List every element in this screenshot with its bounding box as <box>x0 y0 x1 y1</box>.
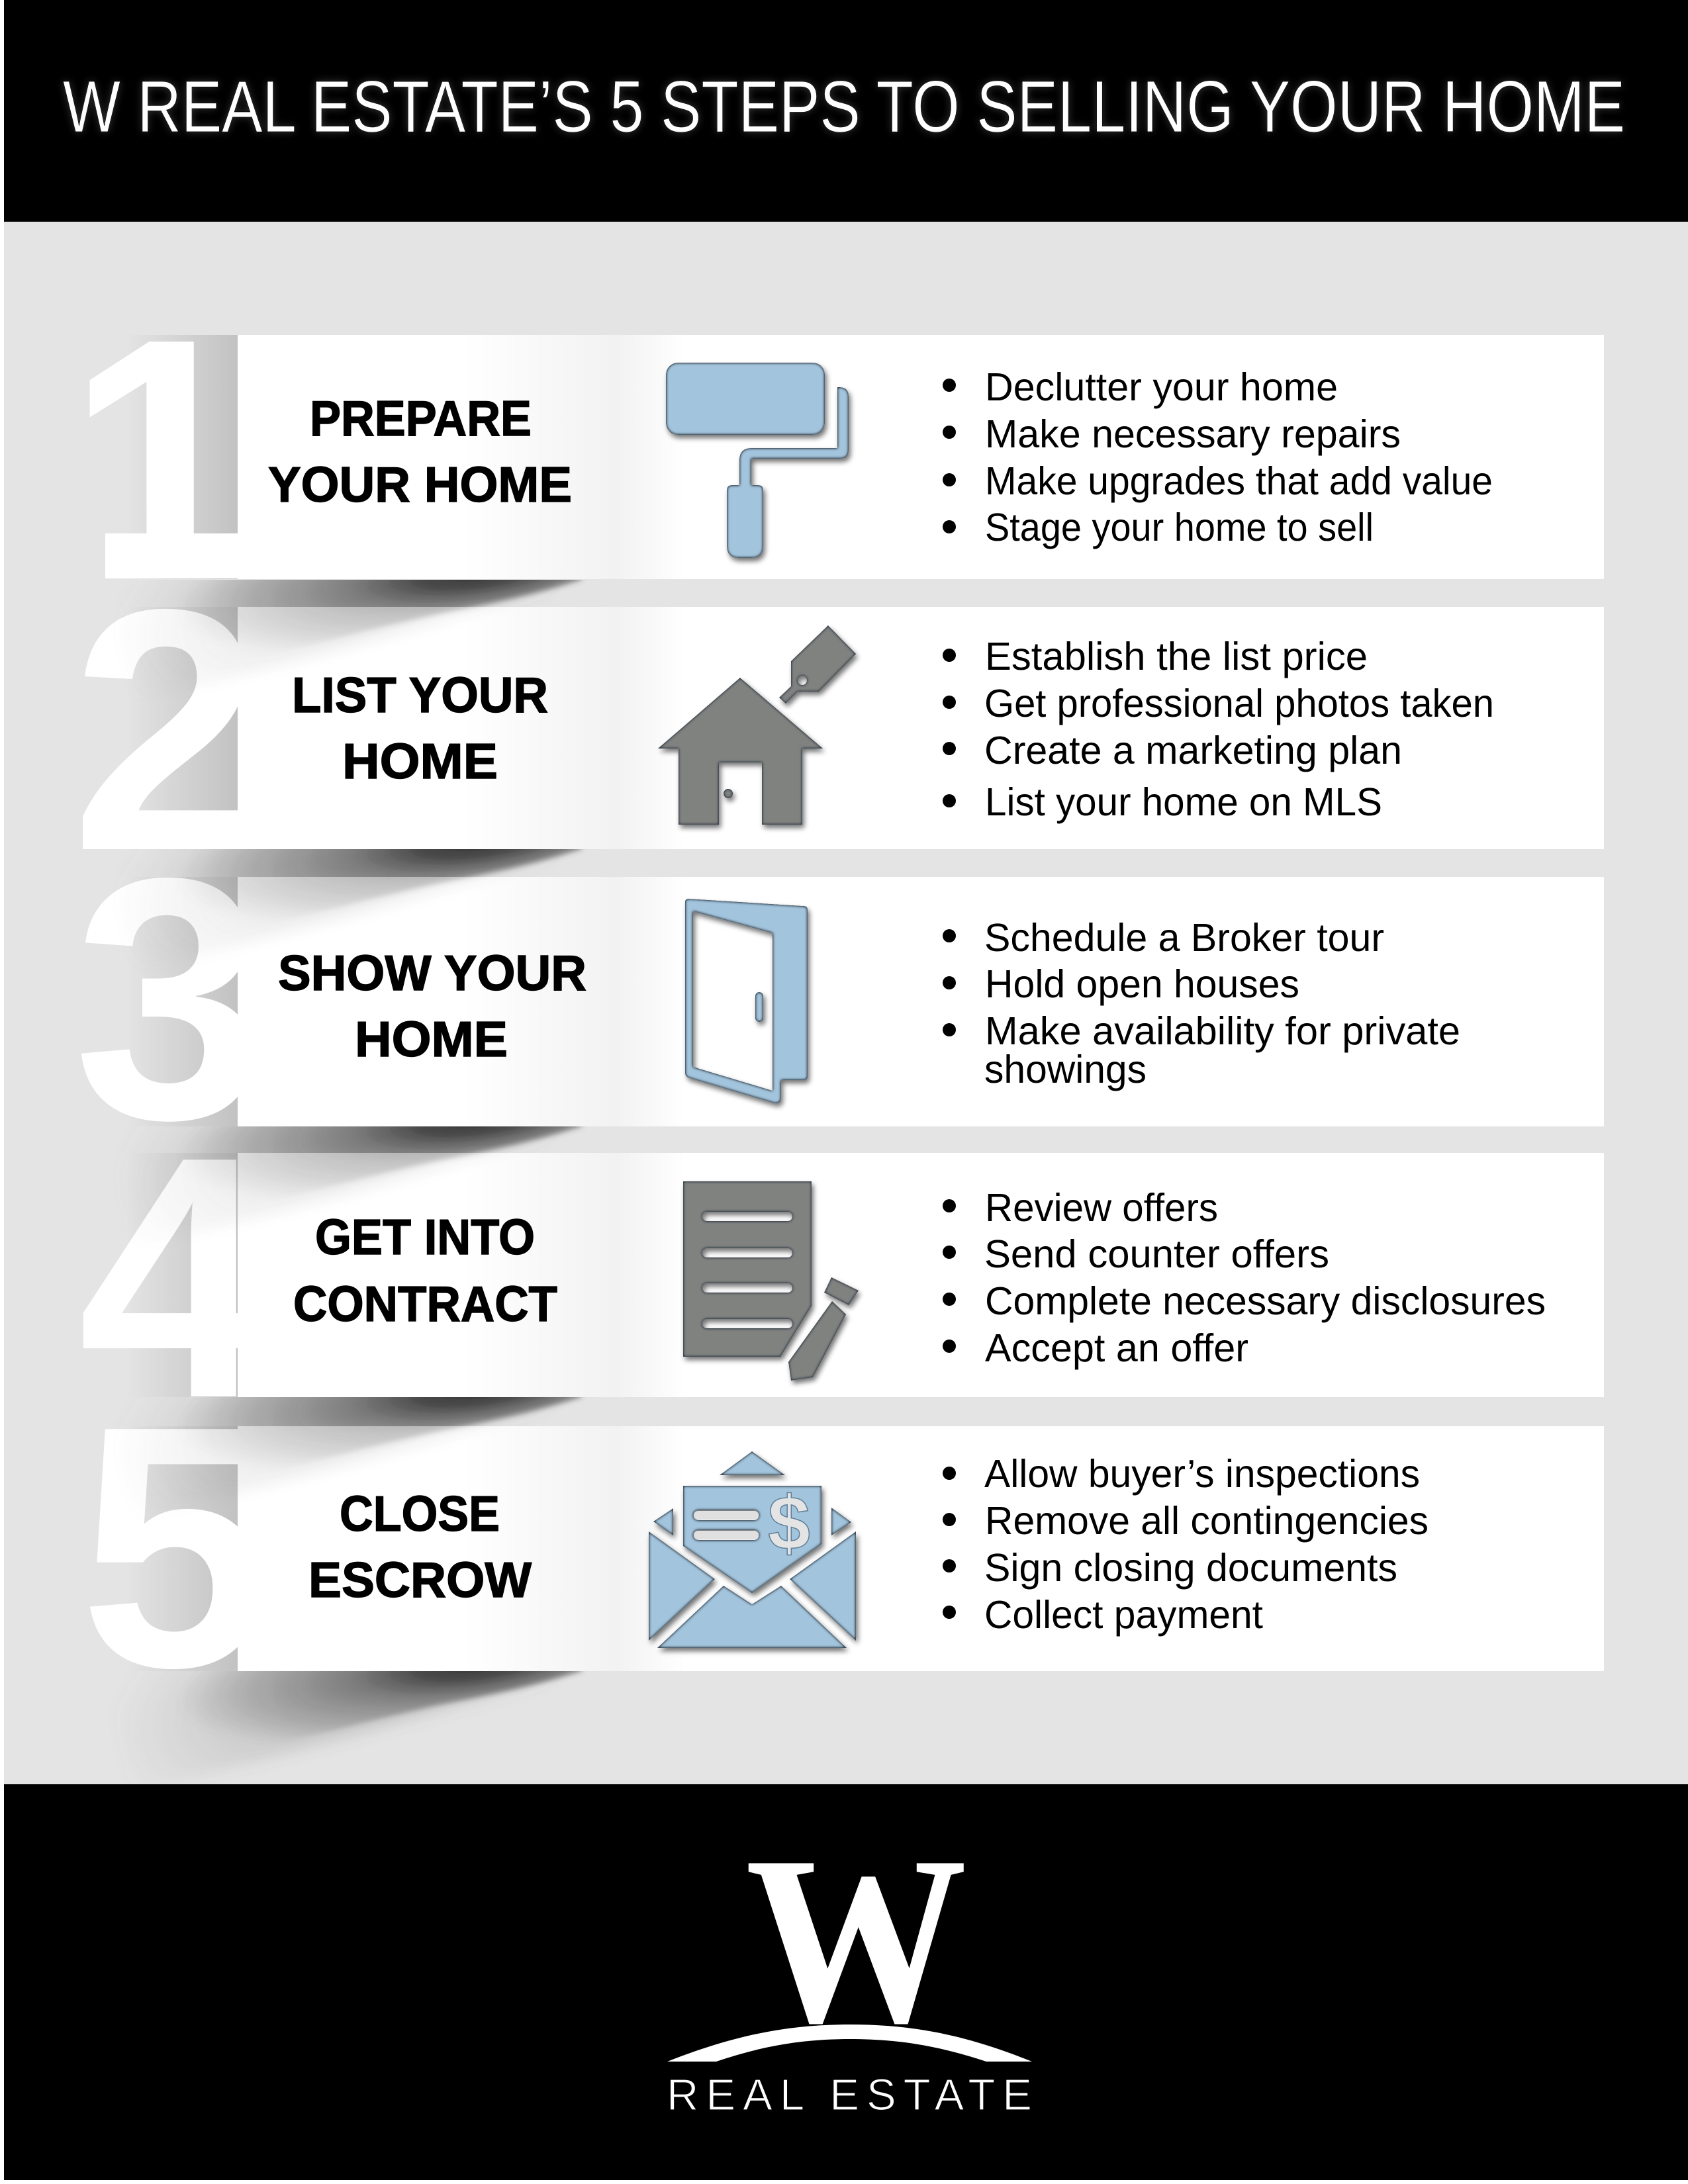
heading: list your home: HOME <box>342 733 498 789</box>
logo: W Real Estate: W <box>745 1807 967 2073</box>
heading: prepare your home: YOUR HOME <box>268 457 572 512</box>
heading: close escrow <box>308 1486 532 1608</box>
heading: prepare your home: PREPARE <box>310 390 532 446</box>
bullet list: step 1: Stage your home to sell <box>985 506 1374 549</box>
heading: prepare your home <box>268 390 572 512</box>
bullet list: step 3: Make availability for private <box>985 1009 1460 1053</box>
logo: W Real Estate <box>667 1807 1032 2120</box>
icon: paint roller <box>666 363 849 558</box>
bullet list: step 3: Hold open houses <box>985 962 1299 1006</box>
cast shadows under panels <box>154 580 584 1774</box>
icon: open door <box>685 899 808 1103</box>
heading: close escrow: CLOSE <box>340 1486 500 1541</box>
bullet list: step 4: Review offers <box>985 1186 1218 1230</box>
bullet list: step 4: Accept an offer <box>985 1326 1248 1370</box>
heading: show your home: HOME <box>355 1011 508 1067</box>
large step numerals: 5 <box>79 1355 271 1739</box>
panel: step 5 close escrow <box>238 1426 1604 1671</box>
bullet list: step 1 <box>943 365 1493 549</box>
bullet list: step 2: Get professional photos taken <box>984 682 1494 725</box>
bullet list: step 5: Sign closing documents <box>984 1546 1397 1590</box>
panel: step 3 show your home <box>238 877 1604 1126</box>
panel: step 1 prepare your home <box>238 335 1604 579</box>
bullet list: step 4 <box>943 1186 1546 1370</box>
bullet list: step 2: Establish the list price <box>985 635 1368 678</box>
bullet list: step 3 <box>943 916 1460 1091</box>
bullet list: step 1: Make upgrades that add value <box>985 459 1493 503</box>
heading: show your home <box>278 945 586 1067</box>
bullet list: step 5: Remove all contingencies <box>985 1499 1429 1543</box>
logo: W Real Estate: REAL ESTATE <box>667 2070 1032 2120</box>
large step numerals: 4 <box>78 1085 271 1470</box>
bullet list: step 5: Allow buyer’s inspections <box>984 1452 1420 1496</box>
panel: step 2 list your home <box>238 607 1604 849</box>
bullet list: step 4: Send counter offers <box>984 1232 1329 1276</box>
icon: house with price tag <box>658 625 856 825</box>
icon: open envelope with dollar letter: $ <box>768 1481 810 1566</box>
bullet list: step 3: Schedule a Broker tour <box>984 916 1384 960</box>
footer band <box>4 1784 1688 2180</box>
bullet list: step 1: Declutter your home <box>985 365 1338 409</box>
large step numerals: 3 <box>73 807 265 1191</box>
icon: open envelope with dollar letter <box>649 1451 856 1648</box>
heading: get into contract: CONTRACT <box>293 1276 557 1332</box>
heading: list your home <box>292 667 548 789</box>
shaded bands behind numerals <box>126 335 238 1671</box>
large step numerals: 1 <box>66 267 258 652</box>
grey page background <box>4 222 1688 1784</box>
bullet list: step 3: showings <box>984 1048 1147 1091</box>
bullet list: step 5 <box>943 1452 1429 1637</box>
large step numerals <box>81 341 238 1669</box>
heading: show your home: SHOW YOUR <box>278 945 586 1001</box>
bullet list: step 5: Collect payment <box>984 1593 1263 1637</box>
heading: get into contract <box>293 1209 557 1332</box>
heading: close escrow: ESCROW <box>308 1552 532 1608</box>
icon: contract and pencil <box>683 1181 859 1381</box>
heading: get into contract: GET INTO <box>315 1209 535 1265</box>
bullet list: step 2: List your home on MLS <box>985 780 1382 824</box>
bullet list: step 2: Create a marketing plan <box>984 729 1402 772</box>
large step numerals: 2 <box>71 538 262 923</box>
bullet list: step 1: Make necessary repairs <box>985 412 1401 456</box>
bullet list: step 4: Complete necessary disclosures <box>985 1279 1546 1323</box>
header band <box>4 0 1688 222</box>
bullet list: step 2 <box>943 635 1494 824</box>
panel: step 4 get into contract <box>238 1153 1604 1397</box>
heading: list your home: LIST YOUR <box>292 667 548 723</box>
